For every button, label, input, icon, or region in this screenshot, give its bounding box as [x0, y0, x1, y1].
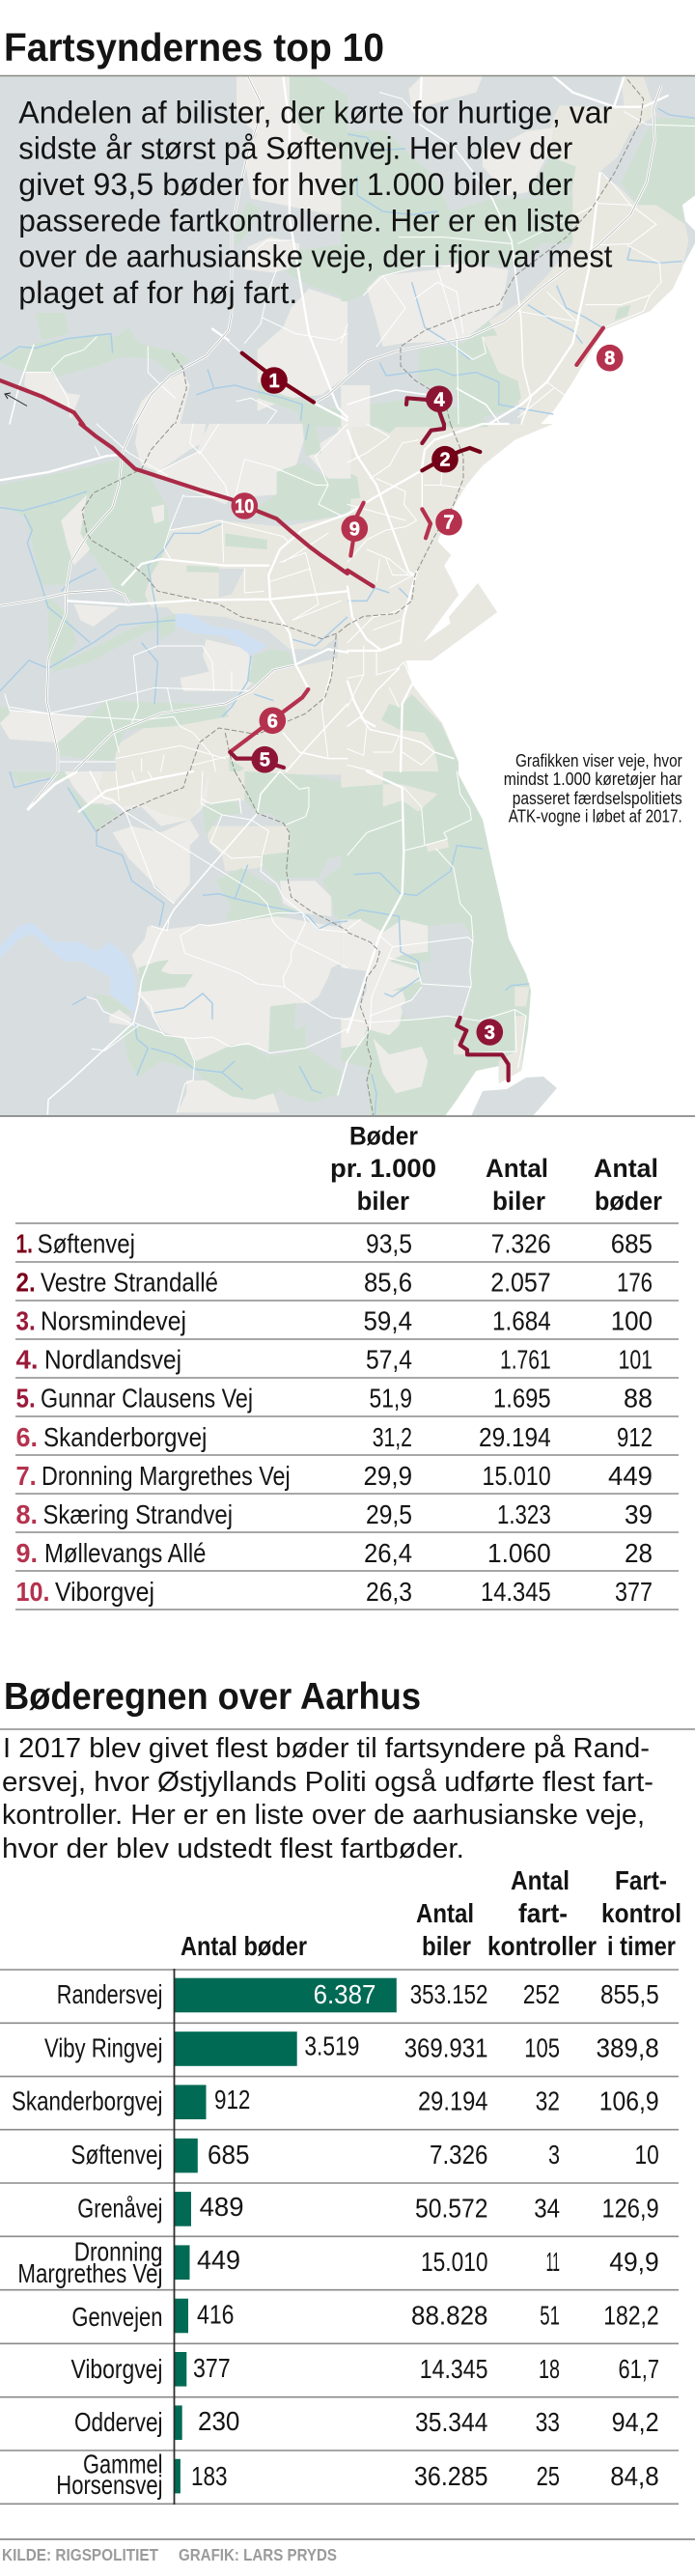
intro text on map: passerede fartkontrollerne. Her er en liste [18, 203, 580, 238]
streams [0, 108, 695, 1115]
row: Grenåvej: 126,9 [602, 2194, 659, 2224]
route 9: Møllevangs Allé: 9 [349, 518, 360, 540]
row: Genvejen: Genvejen [71, 2302, 162, 2332]
motorways [0, 76, 661, 810]
chart header: kontroller [487, 1931, 597, 1961]
row 8: 29,5 [366, 1499, 412, 1529]
row: Grenåvej: Grenåvej [77, 2194, 162, 2224]
row: Grenåvej: 34 [534, 2194, 560, 2224]
southern spit [471, 1077, 557, 1116]
chart header: Antal [511, 1865, 570, 1895]
chart header: kontrol [601, 1898, 681, 1928]
row 8: 39 [625, 1499, 653, 1529]
row: Oddervej: 94,2 [612, 2407, 659, 2437]
route 6: Skanderborgvej: 6 [267, 711, 278, 732]
row 2: 2. [15, 1267, 36, 1298]
row: Dronning Margrethes Vej: 449 [197, 2245, 240, 2275]
row: Gammel Horsensvej: Gammel [83, 2450, 162, 2479]
row: Dronning Margrethes Vej: 49,9 [609, 2247, 659, 2277]
row 7: 15.010 [483, 1461, 551, 1491]
row: Gammel Horsensvej [56, 2450, 659, 2500]
row: Viby Ringvej: Viby Ringvej [44, 2032, 162, 2062]
row 6: 29.194 [479, 1422, 551, 1452]
land cover: north-east [341, 76, 695, 427]
row 9: 9. [15, 1538, 38, 1568]
row 5: Gunnar Clausens Vej [41, 1384, 253, 1414]
table rules [15, 1223, 679, 1610]
row 6: 6. [15, 1422, 38, 1452]
row: Oddervej: 230 [198, 2406, 239, 2436]
row: Viborgvej: Viborgvej [71, 2354, 162, 2384]
row: Dronning Margrethes Vej: 11 [546, 2247, 560, 2277]
chart header: i timer [607, 1931, 676, 1961]
row: Grenåvej: 489 [200, 2192, 243, 2222]
row: Viborgvej: 14.345 [420, 2354, 488, 2384]
row 4: Nordlandsvej [44, 1345, 181, 1375]
chart axis [174, 1969, 176, 2505]
table header: Antal [594, 1154, 658, 1183]
row: Genvejen: 51 [540, 2300, 560, 2331]
land cover: west [0, 424, 350, 774]
row: Randersvej [57, 1978, 659, 2012]
row: Viby Ringvej: 105 [524, 2032, 560, 2062]
row: Genvejen: 182,2 [603, 2300, 659, 2331]
chart header [181, 1865, 681, 1961]
row: Oddervej: Oddervej [74, 2407, 162, 2437]
intro paragraph 2: hvor der blev udstedt flest fartbøder. [2, 1834, 464, 1864]
row 4: 1.761 [500, 1345, 551, 1375]
row 10: 10. [15, 1577, 50, 1607]
title: Fartsyndernes top 10: Fartsyndernes top 10 [4, 25, 384, 70]
row: Skanderborgvej: 32 [536, 2086, 560, 2116]
row: Viby Ringvej: 3.519 [304, 2031, 359, 2060]
row 6: 31,2 [373, 1422, 412, 1452]
row: Skanderborgvej [12, 2085, 659, 2119]
row: Gammel Horsensvej: 84,8 [610, 2461, 659, 2491]
row 7 [15, 1461, 653, 1491]
row: Skanderborgvej: 912 [214, 2085, 250, 2114]
row: Randersvej: 353.152 [410, 1979, 488, 2009]
route 2: Vestre Strandallé: 2 [439, 450, 451, 471]
intro paragraph 2: kontroller. Her er en liste over de aarhusianske veje, [2, 1800, 645, 1831]
row: Dronning Margrethes Vej [17, 2237, 659, 2288]
row: Skanderborgvej: Skanderborgvej [12, 2086, 162, 2116]
intro paragraph 2 [2, 1733, 653, 1864]
route 4: Nordlandsvej: 4 [433, 389, 445, 410]
table header: pr. 1.000 [330, 1154, 436, 1183]
row: Randersvej: 855,5 [600, 1979, 659, 2009]
row 5: 5. [15, 1384, 36, 1414]
route 8: Skæring Strandvej: 8 [604, 349, 615, 370]
row: Genvejen: 88.828 [411, 2300, 488, 2331]
row 10: 377 [615, 1577, 653, 1607]
row: Randersvej: 6.387 [314, 1979, 375, 2009]
row: Randersvej: Randersvej [57, 1979, 162, 2009]
row: Gammel Horsensvej: 25 [537, 2461, 560, 2491]
table: top 10 [15, 1122, 679, 1610]
row: Søftenvej: 7.326 [430, 2140, 488, 2170]
row 1: 685 [611, 1228, 653, 1258]
chart rules [0, 1970, 679, 2504]
row 2: Vestre Strandallé [41, 1267, 218, 1298]
row: Dronning Margrethes Vej: 15.010 [421, 2247, 488, 2277]
heading: Bøderegnen over Aarhus: Bøderegnen over Aarhus [4, 1676, 421, 1718]
lake: Brabrand Sø [176, 614, 267, 656]
route 7: Dronning Margrethes Vej [422, 509, 462, 538]
row 1: 1. [15, 1228, 33, 1258]
row 9: 28 [625, 1538, 653, 1568]
lake: Mossø arm [0, 923, 135, 1013]
route 1: Søftenvej [242, 353, 314, 403]
route 2: Vestre Strandallé [422, 446, 480, 473]
row: Viborgvej: 61,7 [618, 2354, 659, 2384]
route 1: Søftenvej: 1 [268, 371, 280, 392]
row 10: 26,3 [366, 1577, 412, 1607]
table header: biler [492, 1187, 545, 1216]
route 3: Norsmindevej: 3 [485, 1022, 495, 1044]
row: Gammel Horsensvej: 183 [191, 2461, 228, 2491]
footer credits: KILDE: RIGSPOLITIET [2, 2545, 158, 2564]
row: Genvejen: 416 [197, 2300, 234, 2330]
row 4 [15, 1345, 653, 1375]
row: Oddervej: 33 [536, 2407, 560, 2437]
row: Søftenvej: 10 [635, 2140, 659, 2170]
row: Søftenvej: 3 [548, 2140, 560, 2170]
table header: bøder [595, 1187, 662, 1216]
row 8 [15, 1499, 653, 1529]
row 3 [15, 1305, 653, 1336]
route 3: Norsmindevej [457, 1018, 509, 1080]
icon: direction arrow to Viborg [5, 393, 27, 406]
railway [82, 79, 644, 1115]
land base [0, 76, 695, 1116]
intro text on map: plaget af for høj fart. [18, 275, 297, 310]
route 4: Nordlandsvej [406, 386, 453, 443]
intro paragraph 2: ersvej, hvor Østjyllands Politi også udførte flest fart- [2, 1767, 653, 1798]
row 1: 93,5 [366, 1228, 412, 1258]
row 2: 85,6 [364, 1267, 412, 1298]
row 2: 176 [617, 1267, 653, 1298]
row: Genvejen [71, 2299, 659, 2333]
row 6: 912 [617, 1422, 653, 1452]
row 6: Skanderborgvej [43, 1422, 207, 1452]
row: Gammel Horsensvej: Horsensvej [56, 2470, 162, 2500]
row: Oddervej: 35.344 [415, 2407, 488, 2437]
chart header: Fart- [615, 1865, 667, 1895]
row 9 [15, 1538, 653, 1568]
intro paragraph 2: I 2017 blev givet flest bøder til fartsyndere på Rand- [3, 1733, 650, 1764]
row 4: 57,4 [366, 1345, 412, 1375]
row 7: 449 [608, 1461, 653, 1491]
row 9: 26,4 [364, 1538, 412, 1568]
route 8: Skæring Strandvej [576, 328, 624, 372]
row 6 [15, 1422, 653, 1452]
row 8: Skæring Strandvej [42, 1499, 233, 1529]
land cover: south-west [0, 771, 350, 1112]
row 3: Norsmindevej [41, 1305, 186, 1336]
row 2: 2.057 [490, 1267, 551, 1298]
intro text on map [18, 95, 612, 310]
row 8: 8. [15, 1499, 38, 1529]
row: Oddervej [74, 2405, 659, 2440]
row 10 [15, 1577, 653, 1607]
intro text on map: sidste år størst på Søftenvej. Her blev der [18, 131, 572, 166]
row 3: 1.684 [492, 1305, 551, 1336]
map note [504, 751, 682, 826]
row 5: 51,9 [369, 1384, 412, 1414]
row: Viborgvej: 377 [193, 2353, 231, 2383]
row: Søftenvej: Søftenvej [71, 2140, 162, 2170]
route 5: Gunnar Clausens Vej [230, 746, 284, 772]
footer credits [2, 2545, 337, 2564]
table header: biler [357, 1187, 409, 1216]
row: Grenåvej: 50.572 [415, 2194, 488, 2224]
row: Grenåvej [77, 2192, 659, 2226]
chart header: Antal bøder [181, 1931, 307, 1961]
row: Skanderborgvej: 29.194 [418, 2086, 488, 2116]
row: Viby Ringvej: 389,8 [597, 2032, 659, 2062]
row 9: 1.060 [487, 1538, 551, 1568]
row: Dronning Margrethes Vej: Dronning [74, 2237, 162, 2267]
row 3: 3. [15, 1305, 36, 1336]
row 1 [15, 1228, 653, 1258]
row: Søftenvej: 685 [208, 2140, 249, 2170]
row: Dronning Margrethes Vej: Margrethes Vej [17, 2258, 163, 2288]
route 9: Møllevangs Allé [342, 503, 368, 556]
footer credits: GRAFIK: LARS PRYDS [179, 2545, 337, 2564]
row 7: Dronning Margrethes Vej [42, 1461, 291, 1491]
row 5 [15, 1384, 653, 1414]
row 3: 100 [611, 1305, 653, 1336]
row 3: 59,4 [363, 1305, 412, 1336]
row 8: 1.323 [497, 1499, 551, 1529]
route 6: Skanderborgvej [230, 689, 308, 752]
row: Viby Ringvej [44, 2031, 659, 2066]
chart header: fart- [518, 1898, 568, 1928]
row 5: 88 [624, 1384, 653, 1414]
row: Randersvej: 252 [523, 1979, 560, 2009]
row 5: 1.695 [493, 1384, 551, 1414]
row 7: 7. [15, 1461, 37, 1491]
route 10: Viborgvej [0, 380, 374, 586]
row: Søftenvej [71, 2139, 659, 2172]
table header: Bøder [349, 1122, 418, 1151]
table header: Antal [486, 1154, 548, 1183]
land cover: south-east peninsula [341, 771, 531, 1117]
row 1: 7.326 [491, 1228, 551, 1258]
row: Gammel Horsensvej: 36.285 [414, 2461, 488, 2491]
table header [330, 1122, 662, 1216]
intro text on map: givet 93,5 bøder for hver 1.000 biler, der [18, 167, 572, 202]
route 5: Gunnar Clausens Vej: 5 [260, 750, 270, 771]
land cover: north-west [0, 76, 348, 427]
row 1: Søftenvej [38, 1228, 135, 1258]
chart: bøder per vej [0, 1865, 681, 2505]
road network [0, 76, 695, 1114]
route 7: Dronning Margrethes Vej: 7 [443, 513, 455, 534]
route 10: Viborgvej: 10 [235, 496, 254, 518]
intro text on map: over de aarhusianske veje, der i fjor var mest [18, 239, 612, 274]
row: Viby Ringvej: 369.931 [404, 2032, 488, 2062]
row 9: Møllevangs Allé [44, 1538, 207, 1568]
urban area: city centre [338, 424, 553, 774]
row: Viborgvej: 18 [539, 2354, 560, 2384]
row 10: 14.345 [481, 1577, 551, 1607]
row 4: 101 [618, 1345, 653, 1375]
row 10: Viborgvej [55, 1577, 154, 1607]
row 7: 29,9 [363, 1461, 412, 1491]
panel: map of Aarhus [0, 76, 695, 1117]
intro text on map: Andelen af bilister, der kørte for hurtige, var [18, 95, 612, 129]
row 4: 4. [15, 1345, 39, 1375]
row: Skanderborgvej: 106,9 [599, 2086, 659, 2116]
chart header: biler [422, 1931, 471, 1961]
chart header: Antal [416, 1898, 474, 1928]
row 2 [15, 1267, 653, 1298]
row: Viborgvej [71, 2352, 659, 2387]
